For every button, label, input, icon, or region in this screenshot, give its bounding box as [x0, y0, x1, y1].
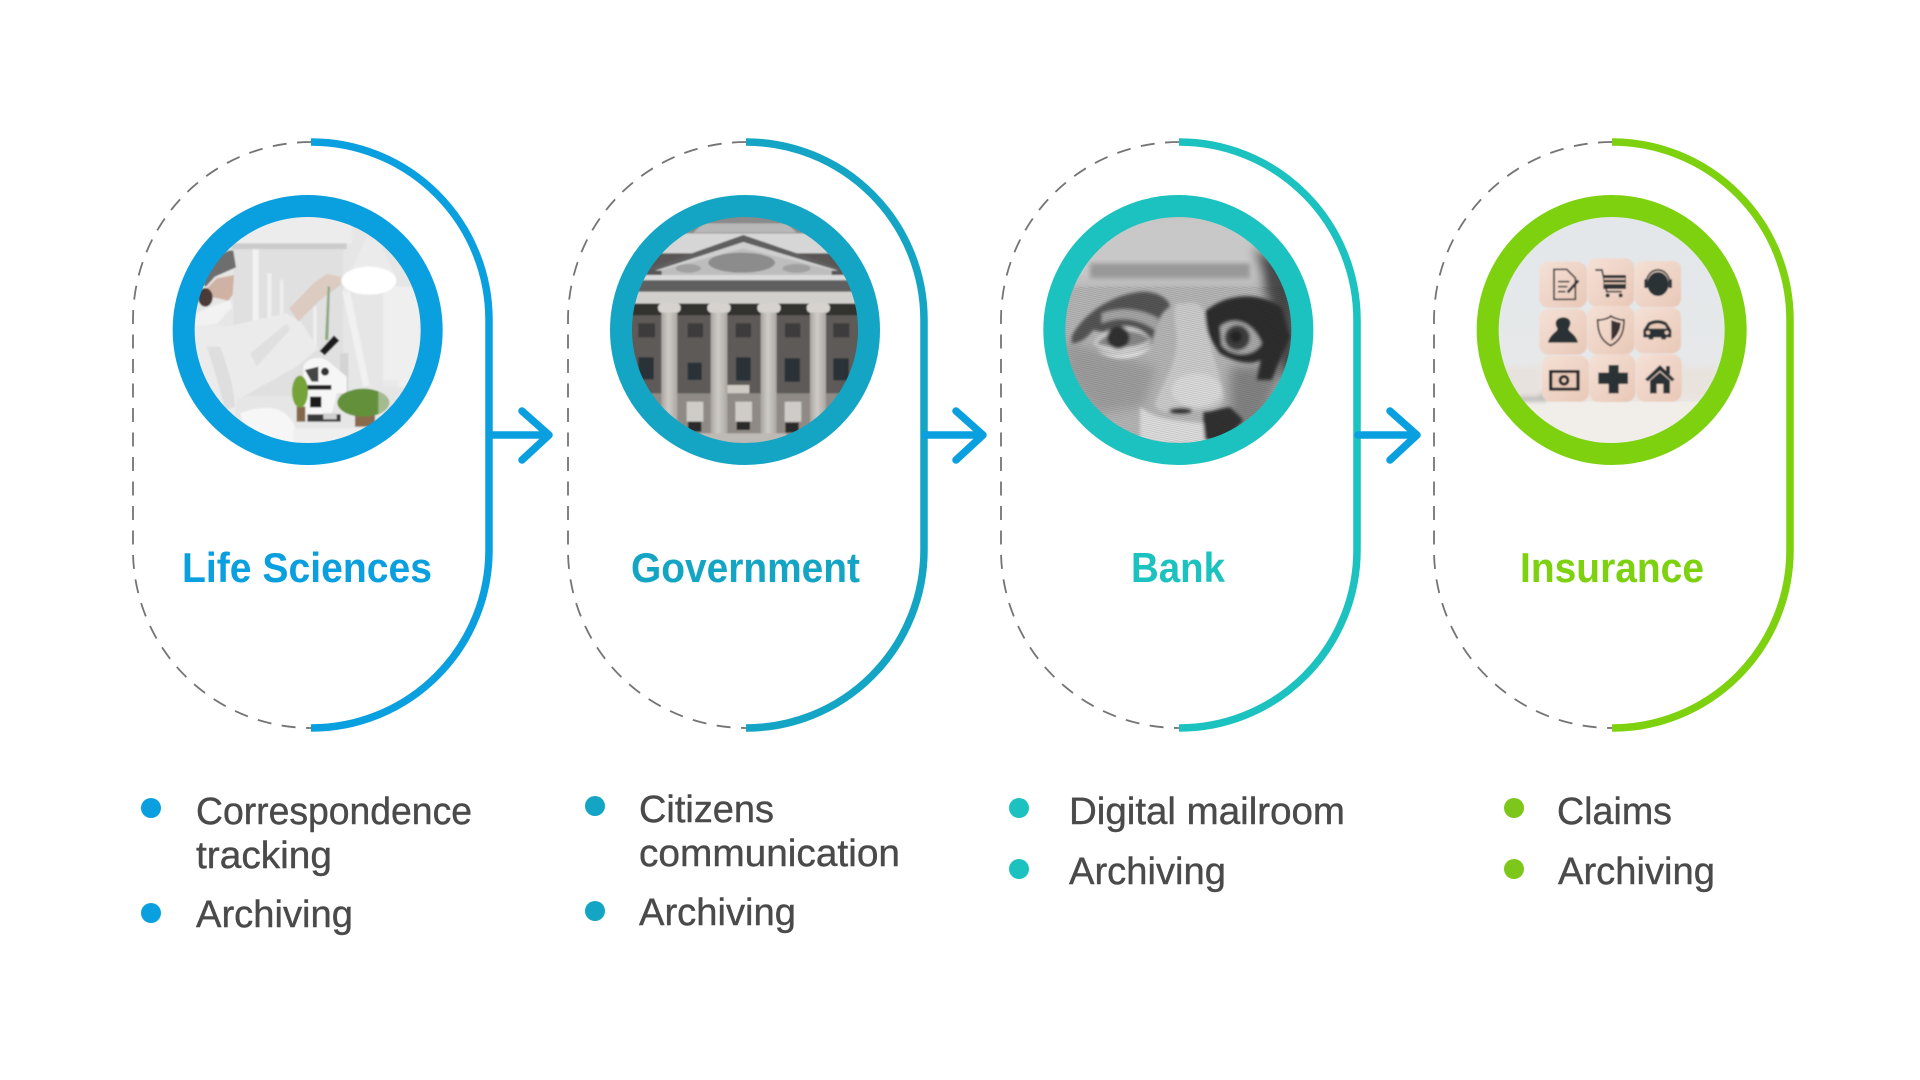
bullet list: Life Sciences: Archiving	[196, 894, 353, 936]
bullet list: Insurance: Archiving	[1558, 851, 1715, 893]
arrow: Bank to Insurance	[1358, 411, 1417, 460]
panel: Bank	[1001, 142, 1357, 893]
bullet list: Bank: Digital mailroom	[1069, 791, 1345, 833]
bullet list: Bank	[1009, 791, 1345, 893]
panel: Life Sciences	[133, 142, 489, 936]
arrow: Government to Bank	[925, 411, 983, 460]
arrow: Life Sciences to Government	[490, 411, 549, 460]
bullet list: Insurance: Claims	[1557, 791, 1672, 833]
title: Government: Government	[631, 544, 860, 591]
bullet list: Government: Archiving	[639, 892, 796, 934]
title: Insurance: Insurance	[1520, 544, 1704, 591]
bullet list: Bank: Archiving	[1069, 851, 1226, 893]
ring: Life Sciences	[184, 206, 432, 454]
panel: Government	[568, 142, 924, 934]
photo: scientist with microscope	[184, 206, 432, 454]
bullet list: Insurance	[1504, 791, 1715, 893]
ring: Insurance	[1488, 206, 1736, 454]
title: Bank: Bank	[1131, 544, 1226, 591]
photo: government building with columns	[621, 206, 869, 454]
bullet list: Life Sciences: Correspondence	[196, 791, 472, 833]
photo: banknote portrait	[1054, 206, 1302, 454]
bullet list: Life Sciences: tracking	[196, 835, 332, 877]
ring: Bank	[1054, 206, 1302, 454]
title: Life Sciences: Life Sciences	[182, 544, 432, 591]
bullet list: Life Sciences	[141, 791, 472, 936]
photo: insurance icon blocks	[1488, 206, 1736, 454]
bullet list: Government	[585, 789, 900, 934]
ring: Government	[621, 206, 869, 454]
bullet list: Government: communication	[639, 833, 900, 875]
bullet list: Government: Citizens	[639, 789, 774, 831]
panel: Insurance	[1434, 142, 1790, 893]
